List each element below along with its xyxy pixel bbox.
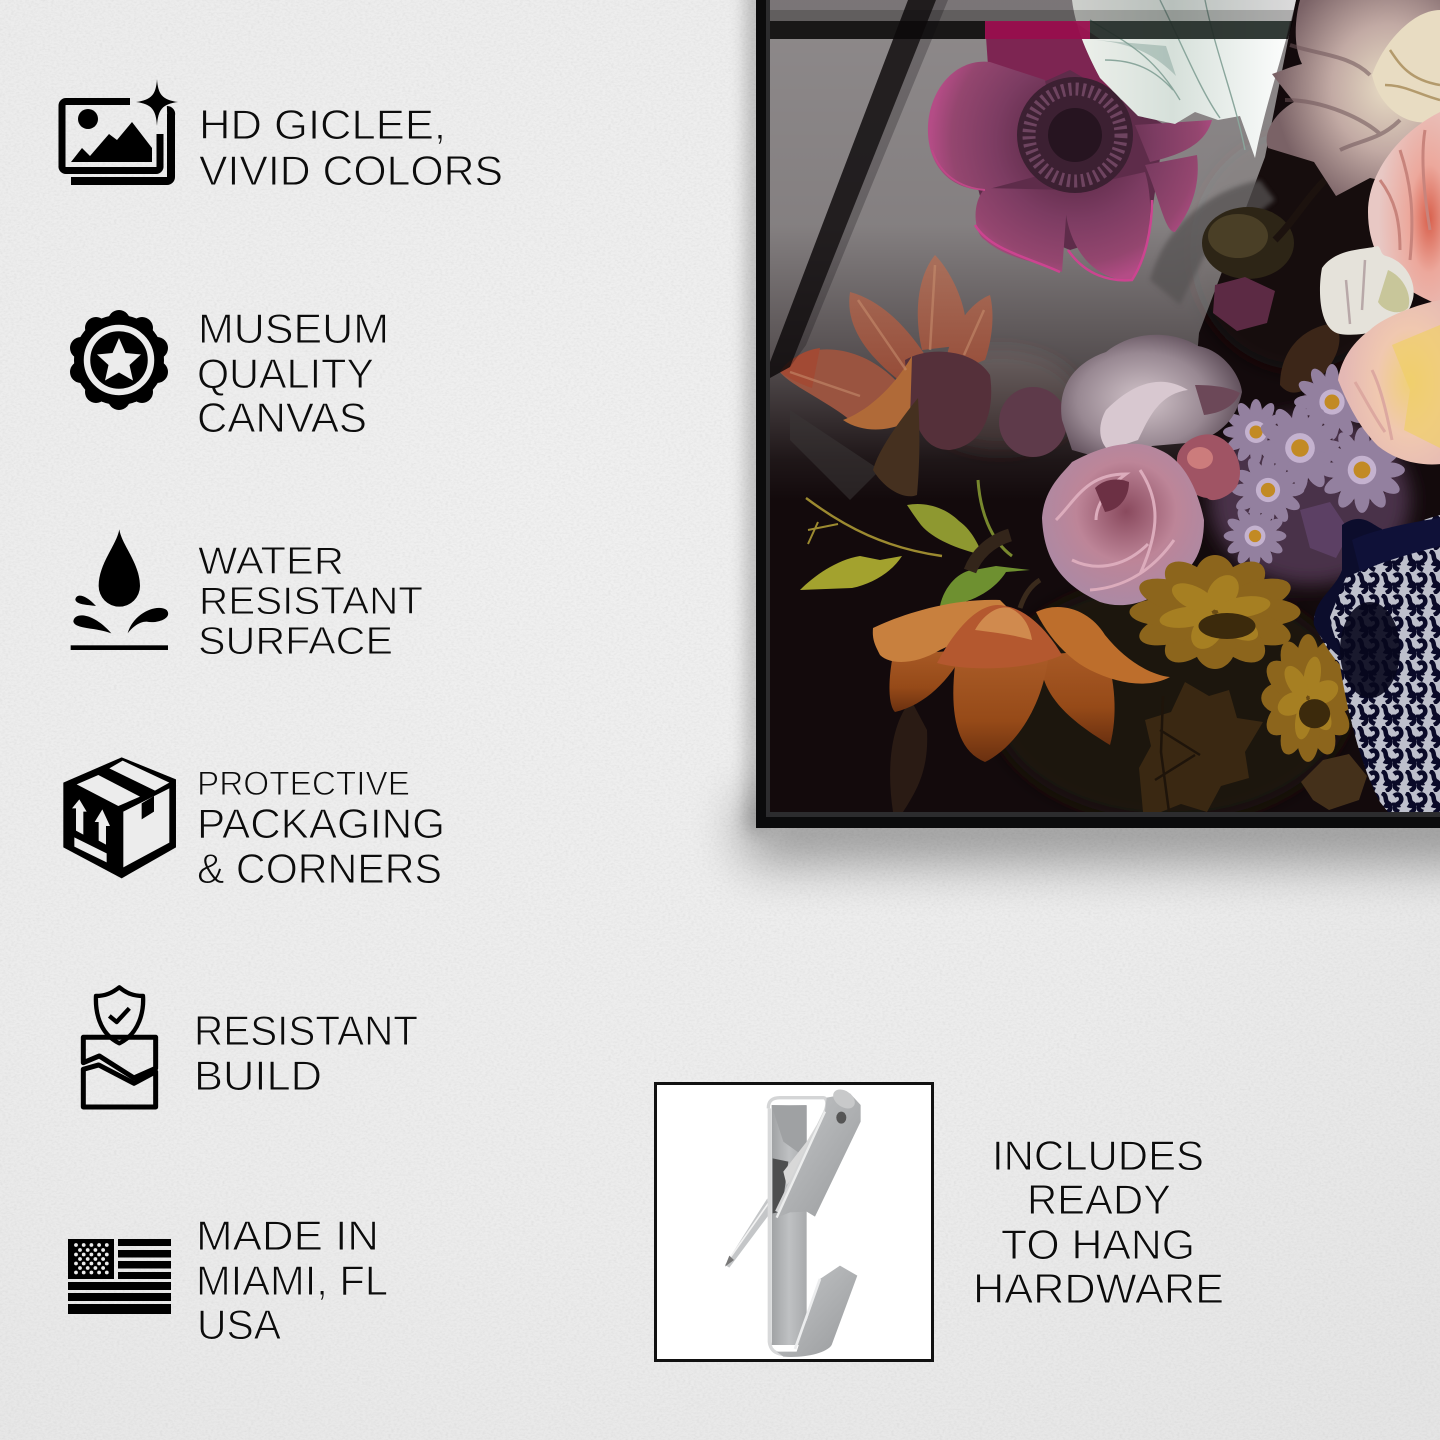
icon: shipping box	[63, 757, 176, 878]
icon: star badge	[70, 310, 168, 410]
text: water resistant: SURFACE	[198, 620, 393, 663]
gold flowers	[1130, 555, 1355, 762]
black frame	[756, 0, 1440, 828]
white petal leaf	[1072, 0, 1296, 158]
mauve rose	[1061, 335, 1242, 464]
text: protective packaging: PROTECTIVE	[197, 765, 410, 803]
orange tulip	[873, 600, 1170, 762]
text: museum quality: QUALITY	[197, 350, 374, 397]
icon: shield on cracked box	[83, 987, 156, 1107]
text: museum quality: MUSEUM	[198, 305, 389, 352]
olive bud	[1202, 180, 1325, 331]
brown leaf	[1280, 323, 1339, 393]
green leaves and stem	[800, 480, 1040, 608]
purple daisies	[1223, 364, 1405, 567]
small pink bud	[1177, 434, 1240, 500]
text: protective packaging	[197, 765, 445, 892]
text: water resistant: WATER	[198, 540, 344, 583]
icon: water drop splash	[71, 529, 168, 650]
anemone flower	[928, 22, 1212, 280]
text: museum quality: CANVAS	[197, 394, 367, 441]
framed floral painting	[756, 0, 1440, 828]
text: made in Miami: USA	[197, 1301, 281, 1348]
text: HD giclee: VIVID COLORS	[199, 147, 503, 194]
text: resistant build: RESISTANT	[194, 1007, 418, 1054]
pink peony	[1368, 112, 1440, 306]
text: protective packaging: & CORNERS	[197, 845, 442, 892]
small rose	[999, 387, 1067, 457]
feature: water resistant	[71, 529, 423, 663]
feature: made in Miami	[68, 1212, 388, 1348]
dark foliage	[964, 349, 1419, 812]
pink rose	[1042, 444, 1204, 605]
text: made in Miami: MADE IN	[196, 1212, 379, 1259]
text: includes ready to hang hardware: INCLUDES	[992, 1132, 1204, 1179]
text: includes ready to hang hardware: HARDWARE	[973, 1265, 1224, 1312]
blue and white vase	[1314, 515, 1440, 812]
text: water resistant: RESISTANT	[199, 580, 423, 623]
painting artwork	[770, 0, 1440, 820]
feature: resistant build	[83, 987, 418, 1107]
red lily	[780, 255, 992, 496]
frame inner line	[768, 0, 1440, 814]
feature: museum quality	[70, 305, 389, 441]
dark bottom leaves	[890, 700, 927, 812]
grey leaf under glass	[1150, 180, 1275, 305]
white bud	[1320, 246, 1414, 335]
text: HD giclee: HD GICLEE,	[199, 101, 446, 148]
feature: HD giclee	[62, 79, 503, 194]
hardware photo panel	[656, 1084, 932, 1360]
icon: image with sparkle	[62, 79, 178, 181]
yellow pink peony	[1338, 300, 1440, 464]
icon: USA flag	[68, 1239, 171, 1314]
glass reflection	[770, 0, 1296, 500]
window reflection bars	[770, 0, 1296, 378]
text: includes ready to hang hardware: TO HANG	[1001, 1221, 1195, 1268]
feature: protective packaging	[63, 757, 445, 892]
text: includes ready to hang hardware: READY	[1027, 1176, 1171, 1223]
icon: sawtooth hook with nail	[725, 1086, 861, 1357]
text: protective packaging: PACKAGING	[197, 800, 445, 847]
top right peony	[1267, 0, 1440, 196]
text: resistant build: BUILD	[194, 1052, 322, 1099]
text: made in Miami: MIAMI, FL	[196, 1257, 388, 1304]
